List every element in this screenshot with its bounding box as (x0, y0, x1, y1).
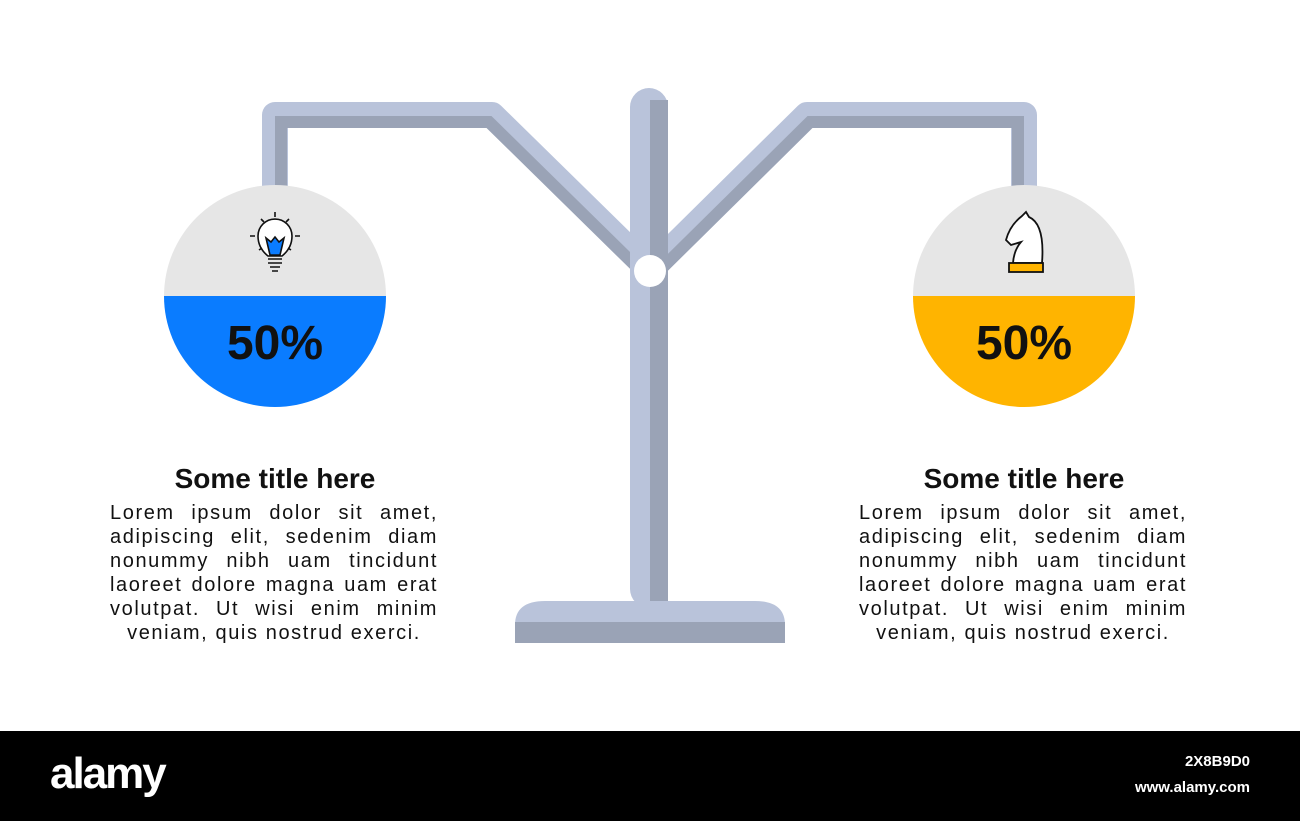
icon: lightbulb (250, 212, 300, 271)
pivot (634, 255, 666, 287)
image id: 2X8B9D0 (1185, 753, 1250, 770)
text right: nonummy nibh uam tincidunt (859, 550, 1187, 572)
footer bar (0, 731, 1300, 821)
title left: Some title here (175, 463, 375, 494)
text right: volutpat. Ut wisi enim minim (859, 598, 1187, 620)
right circle (910, 180, 1140, 416)
title right: Some title here (924, 463, 1124, 494)
right arm (650, 115, 1024, 280)
base (515, 601, 785, 643)
icon: chess knight (1006, 212, 1043, 272)
text right: veniam, quis nostrud exerci. (876, 622, 1170, 644)
text left: adipiscing elit, sedenim diam (110, 526, 438, 548)
text left: volutpat. Ut wisi enim minim (110, 598, 438, 620)
text right: adipiscing elit, sedenim diam (859, 526, 1187, 548)
text left: nonummy nibh uam tincidunt (110, 550, 438, 572)
text right: laoreet dolore magna uam erat (859, 574, 1187, 596)
url: www.alamy.com (1135, 779, 1250, 796)
left circle (160, 180, 390, 416)
text left: veniam, quis nostrud exerci. (127, 622, 421, 644)
scale graphic (164, 88, 1135, 643)
text left (110, 502, 438, 644)
logo: alamy (50, 749, 165, 798)
percent left: 50% (227, 317, 323, 370)
text right (859, 502, 1187, 644)
text left: Lorem ipsum dolor sit amet, (110, 502, 438, 524)
pole (630, 88, 668, 608)
percent right: 50% (976, 317, 1072, 370)
left arm (275, 115, 650, 280)
text right: Lorem ipsum dolor sit amet, (859, 502, 1187, 524)
text left: laoreet dolore magna uam erat (110, 574, 438, 596)
